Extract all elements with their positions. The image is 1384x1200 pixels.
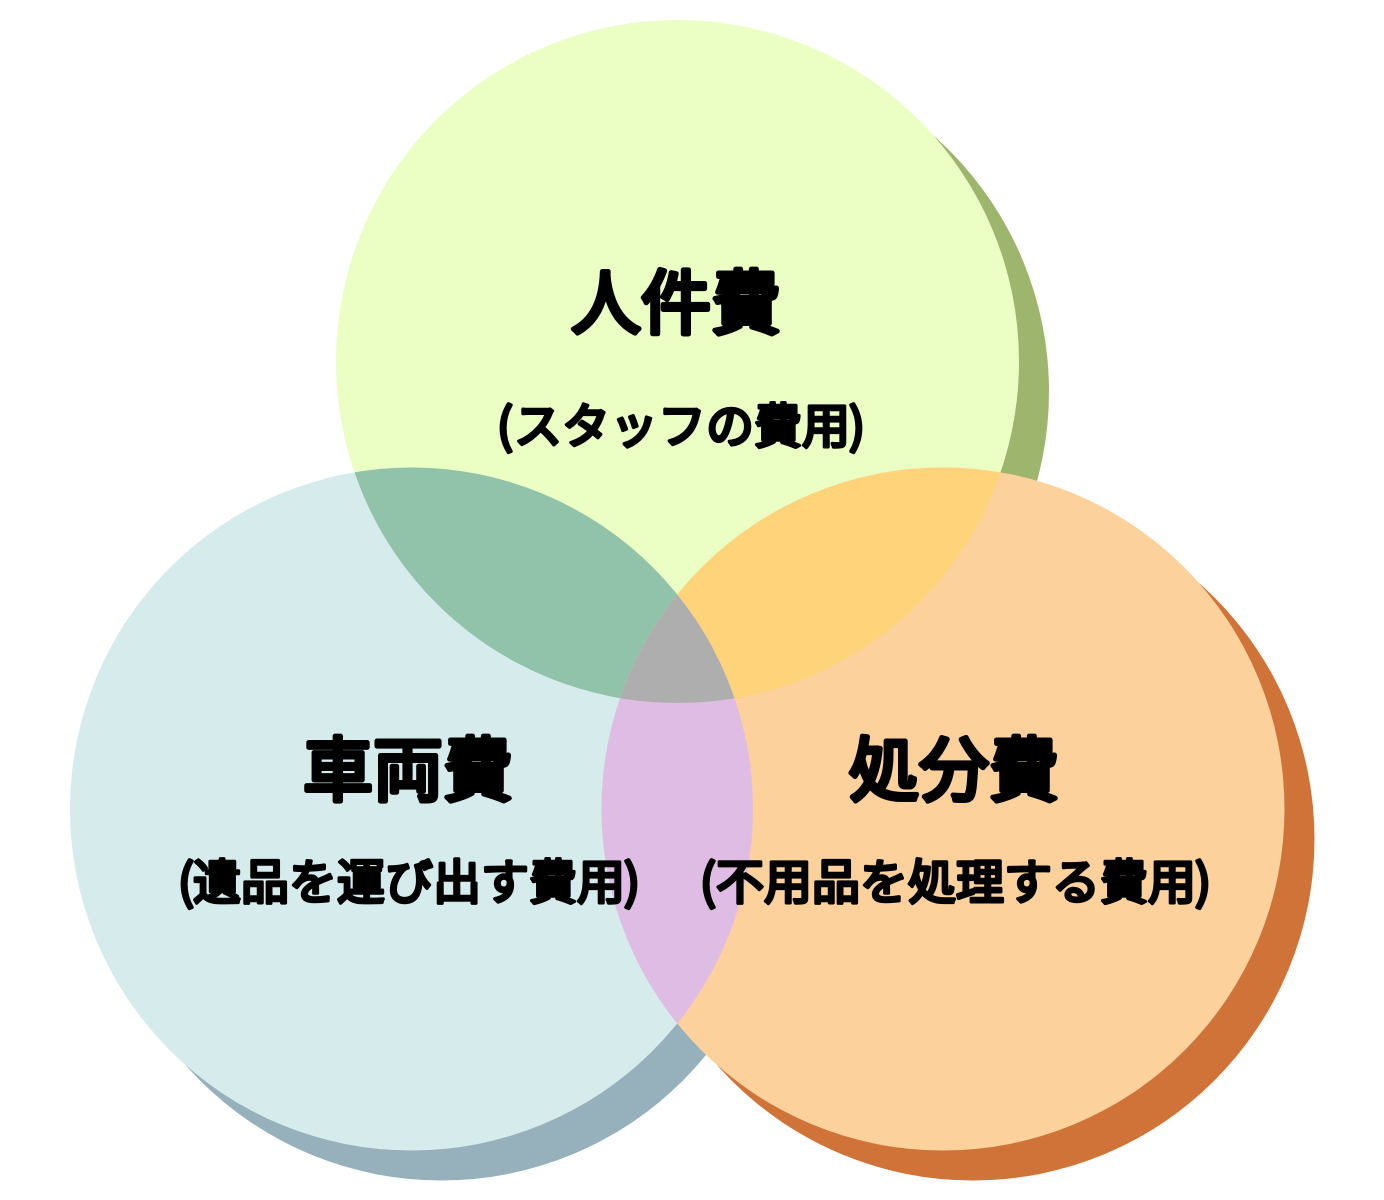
text: vehicle cost description: 遺品を運び出す費用	[193, 843, 625, 913]
text: disposal cost description: (	[700, 843, 716, 913]
text: staff cost description: (	[497, 387, 513, 457]
text: staff cost description: )	[849, 387, 865, 457]
heading: staff cost: 人件費	[571, 248, 781, 349]
overlap: center of all three	[620, 594, 734, 703]
heading: disposal cost: 処分費	[849, 715, 1059, 816]
circle: staff cost	[336, 20, 1019, 703]
heading: vehicle cost: 車両費	[303, 715, 513, 816]
text: disposal cost description: 不用品を処理する費用	[716, 843, 1196, 913]
shadow: left circle	[100, 498, 783, 1180]
text: disposal cost description: )	[1195, 843, 1211, 913]
overlap: vehicle and disposal	[602, 594, 753, 1024]
circle: disposal cost	[602, 468, 1284, 1150]
shadow: top circle	[366, 50, 1049, 733]
overlap: staff and vehicle	[354, 468, 677, 698]
circle: vehicle cost	[70, 468, 753, 1150]
shadow: right circle	[632, 498, 1314, 1180]
text: staff cost description: スタッフの費用	[514, 387, 850, 457]
text: vehicle cost description: (	[178, 843, 194, 913]
text: vehicle cost description: )	[624, 843, 640, 913]
overlap: staff and disposal	[620, 468, 1000, 698]
